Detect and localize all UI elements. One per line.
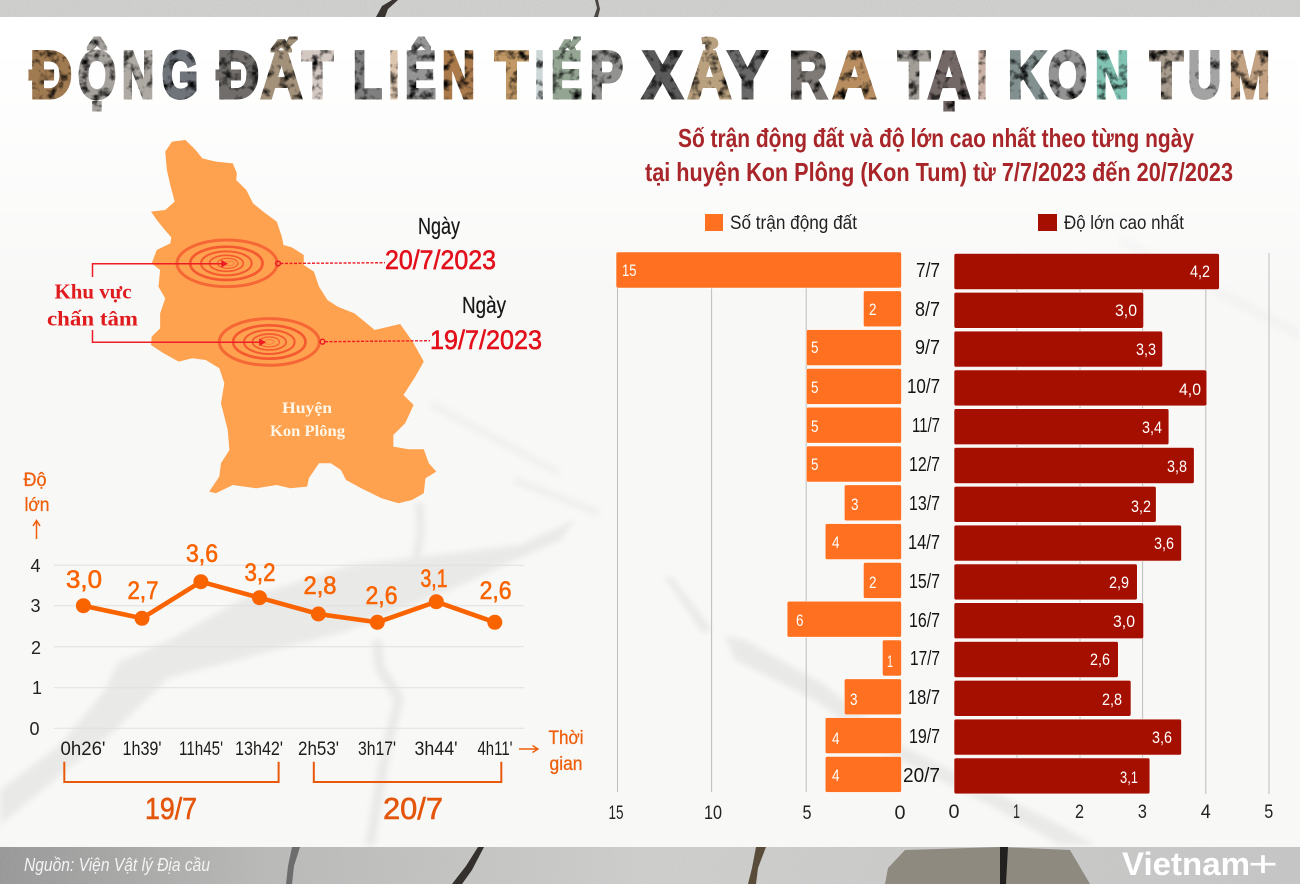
panel: number of quakes bars: 6 [796, 611, 804, 630]
panel: date labels: 10/7 [907, 376, 940, 398]
panel: number of quakes bars: 2 [869, 300, 876, 319]
y axis title [24, 470, 50, 539]
panel: peak magnitude bars: 2,9 [1109, 573, 1129, 592]
panel: district map [47, 140, 542, 503]
title: collage lettering: T [495, 38, 528, 112]
title: collage lettering [30, 38, 1270, 112]
title: collage lettering: L [353, 38, 382, 112]
panel: number of quakes bars: 5 [811, 417, 818, 436]
value labels: 3,0 [66, 566, 102, 594]
top texture band [0, 0, 1300, 17]
x axis title: Thời gian [519, 728, 584, 775]
callout text: Khu vực chấn tâm: Khu vực [54, 280, 132, 304]
title: collage lettering: I [389, 38, 399, 112]
panel: peak magnitude bars [954, 254, 1219, 794]
panel: number of quakes bars [616, 252, 902, 792]
value labels: 2,7 [128, 577, 158, 605]
time labels: 2h53' [298, 739, 339, 760]
panel: number of quakes bars: 1 [887, 652, 893, 671]
date callout: 19/7/2023 [320, 292, 542, 355]
callout lines: epicentre area [92, 261, 264, 345]
panel: number of quakes bars: 4 [832, 729, 840, 748]
y axis gridlines and ticks: 3 [30, 596, 41, 616]
y axis title: Độ [24, 470, 46, 491]
bar chart axis labels: 5 [802, 803, 812, 824]
panel: peak magnitude bars: 3,0 [1115, 301, 1137, 320]
panel: peak magnitude bars: 4,2 [1190, 262, 1210, 281]
y axis gridlines and ticks: 2 [31, 638, 41, 658]
panel: number of quakes bars: 5 [811, 455, 818, 474]
heading: bar chart title [645, 123, 1233, 187]
title: collage lettering: N [122, 38, 154, 112]
source note: Nguồn: Viện Vật lý Địa cầu [24, 855, 210, 875]
map shape: Kon Plông [151, 140, 436, 503]
time labels: 3h44' [414, 739, 458, 760]
bar chart axis labels: 10 [704, 803, 722, 824]
date callout: 20/7/2023: 20/7/2023 [385, 245, 496, 275]
panel: peak magnitude bars: 3,6 [1154, 534, 1174, 553]
logo: Vietnam+ [1122, 843, 1278, 884]
panel: date labels: 14/7 [908, 532, 940, 554]
value labels: 2,8 [304, 572, 336, 600]
y axis title: lớn [24, 495, 50, 516]
bar chart axis labels: 5 [1264, 802, 1273, 823]
date callout: 20/7/2023 [276, 213, 496, 275]
date bracket: 19/7 [64, 762, 279, 826]
title: collage lettering: M [1229, 38, 1270, 112]
x axis title: Thời gian: gian [550, 754, 582, 775]
panel: peak magnitude bars: 3,4 [1142, 418, 1162, 437]
value labels: 2,6 [366, 582, 398, 610]
panel: number of quakes bars: 3 [850, 690, 858, 709]
bar chart axis labels: 15 [608, 803, 624, 824]
date callout: 19/7/2023: Ngày [462, 292, 506, 318]
panel: date labels: 20/7 [903, 765, 940, 787]
title: collage lettering: I [535, 38, 544, 112]
panel: peak magnitude bars: 2,6 [1090, 650, 1110, 669]
panel: peak magnitude bars: 2,8 [1102, 690, 1122, 709]
heading: bar chart title: Số trận động đất và độ lớn cao nhất theo từng ngày [678, 123, 1194, 153]
value labels: 2,6 [480, 577, 512, 605]
bar chart axis labels: 2 [1075, 802, 1084, 823]
time labels: 13h42' [235, 739, 283, 760]
time labels: 1h39' [122, 739, 162, 760]
legend: number of quakes: Số trận động đất [730, 213, 858, 234]
panel: number of quakes bars: 4 [832, 533, 840, 552]
panel: date labels: 19/7 [909, 726, 940, 748]
date bracket: 20/7: 20/7 [383, 791, 443, 826]
title: collage lettering: Ấ [261, 38, 302, 112]
line series [76, 574, 502, 630]
title: collage lettering: O [1048, 38, 1087, 112]
map label: Huyện Kon Plông: Huyện [282, 400, 332, 417]
y axis gridlines and ticks: 0 [29, 719, 40, 739]
logo: Vietnam+: Vietnam [1122, 846, 1250, 882]
y axis gridlines and ticks: 4 [30, 556, 41, 576]
title: collage lettering: I [977, 38, 987, 112]
date bracket: 20/7 [314, 762, 501, 826]
title: collage lettering: Đ [30, 38, 72, 112]
panel: date labels: 15/7 [909, 571, 940, 593]
title: collage lettering: Đ [217, 38, 259, 112]
date callout: 19/7/2023: 19/7/2023 [430, 325, 542, 355]
y axis gridlines and ticks [29, 556, 524, 739]
time labels: 4h11' [478, 739, 512, 760]
panel: peak magnitude bars: 3,6 [1152, 728, 1172, 747]
bar chart axis labels: 0 [948, 802, 960, 823]
bar chart axis labels: 0 [894, 803, 906, 824]
panel: peak magnitude bars: 3,8 [1167, 457, 1187, 476]
title: collage lettering: Ộ [78, 38, 116, 112]
panel: date labels: 12/7 [909, 454, 940, 476]
panel: date labels: 8/7 [915, 299, 940, 321]
date callout: 20/7/2023: Ngày [418, 213, 460, 239]
panel: date labels: 16/7 [909, 610, 940, 632]
panel: date labels [903, 260, 940, 787]
logo: Vietnam+: + [1248, 843, 1278, 884]
title: collage lettering: Ế [551, 38, 582, 112]
value labels: 3,6 [186, 540, 218, 568]
title: collage lettering: K [1008, 38, 1046, 112]
time labels [60, 739, 512, 760]
title: collage lettering: G [162, 38, 198, 112]
bar chart gridlines [618, 253, 1269, 794]
time labels: 0h26' [60, 739, 106, 760]
map label: Huyện Kon Plông [270, 400, 345, 440]
panel: number of quakes bars: 15 [622, 261, 636, 280]
panel: number of quakes bars: 3 [851, 495, 858, 514]
title: collage lettering: A [833, 38, 876, 112]
panel: date labels: 7/7 [916, 260, 940, 282]
value labels [66, 540, 512, 610]
title: collage lettering: Ê [405, 38, 436, 112]
panel: number of quakes bars: 2 [869, 573, 876, 592]
title: collage lettering: N [442, 38, 475, 112]
callout text: Khu vực chấn tâm [47, 280, 139, 330]
epicentre rings: 19/7 [219, 319, 319, 365]
panel: peak magnitude bars: 3,3 [1136, 340, 1156, 359]
panel: peak magnitude bars: 3,2 [1131, 497, 1151, 516]
title: collage lettering: Ạ [928, 38, 970, 112]
bar chart axis labels: 4 [1201, 802, 1211, 823]
title: collage lettering: P [590, 38, 623, 112]
panel: line chart of magnitude by time [24, 470, 584, 826]
title: collage lettering: U [1188, 38, 1221, 112]
panel: date labels: 11/7 [912, 415, 940, 437]
value labels: 3,1 [420, 565, 448, 593]
legend: peak magnitude: Độ lớn cao nhất [1064, 213, 1185, 234]
panel: peak magnitude bars: 3,1 [1120, 768, 1138, 787]
title: collage lettering: Ả [688, 38, 731, 112]
bar chart axis labels: 1 [1013, 802, 1020, 823]
title: collage lettering: N [1095, 38, 1129, 112]
panel: date labels: 13/7 [909, 493, 940, 515]
panel: date labels: 9/7 [915, 337, 940, 359]
epicentre rings: 20/7 [177, 240, 277, 287]
x axis title: Thời gian: Thời [548, 728, 584, 749]
bar chart axis labels: 3 [1138, 802, 1147, 823]
panel: number of quakes bars: 5 [811, 378, 818, 397]
title: collage lettering: T [898, 38, 930, 112]
title: collage lettering: X [643, 38, 682, 112]
time labels: 11h45' [179, 739, 223, 760]
title: collage lettering: T [1150, 38, 1183, 112]
panel: number of quakes bars: 4 [832, 766, 840, 785]
bottom texture band [0, 847, 1300, 884]
value labels: 3,2 [244, 559, 276, 587]
title: collage lettering: R [789, 38, 827, 112]
callout text: Khu vực chấn tâm: chấn tâm [47, 306, 139, 330]
y axis gridlines and ticks: 1 [32, 678, 42, 698]
bar chart axis labels [608, 802, 1273, 824]
panel: peak magnitude bars: 4,0 [1179, 380, 1201, 399]
panel: date labels: 18/7 [908, 687, 940, 709]
title: collage lettering: Y [728, 38, 767, 112]
panel: peak magnitude bars: 3,0 [1113, 612, 1135, 631]
panel: date labels: 17/7 [910, 648, 940, 670]
title: collage lettering: T [302, 38, 333, 112]
date bracket: 19/7: 19/7 [145, 791, 197, 826]
panel: number of quakes bars: 5 [811, 338, 818, 357]
map label: Huyện Kon Plông: Kon Plông [270, 423, 345, 440]
time labels: 3h17' [358, 739, 396, 760]
